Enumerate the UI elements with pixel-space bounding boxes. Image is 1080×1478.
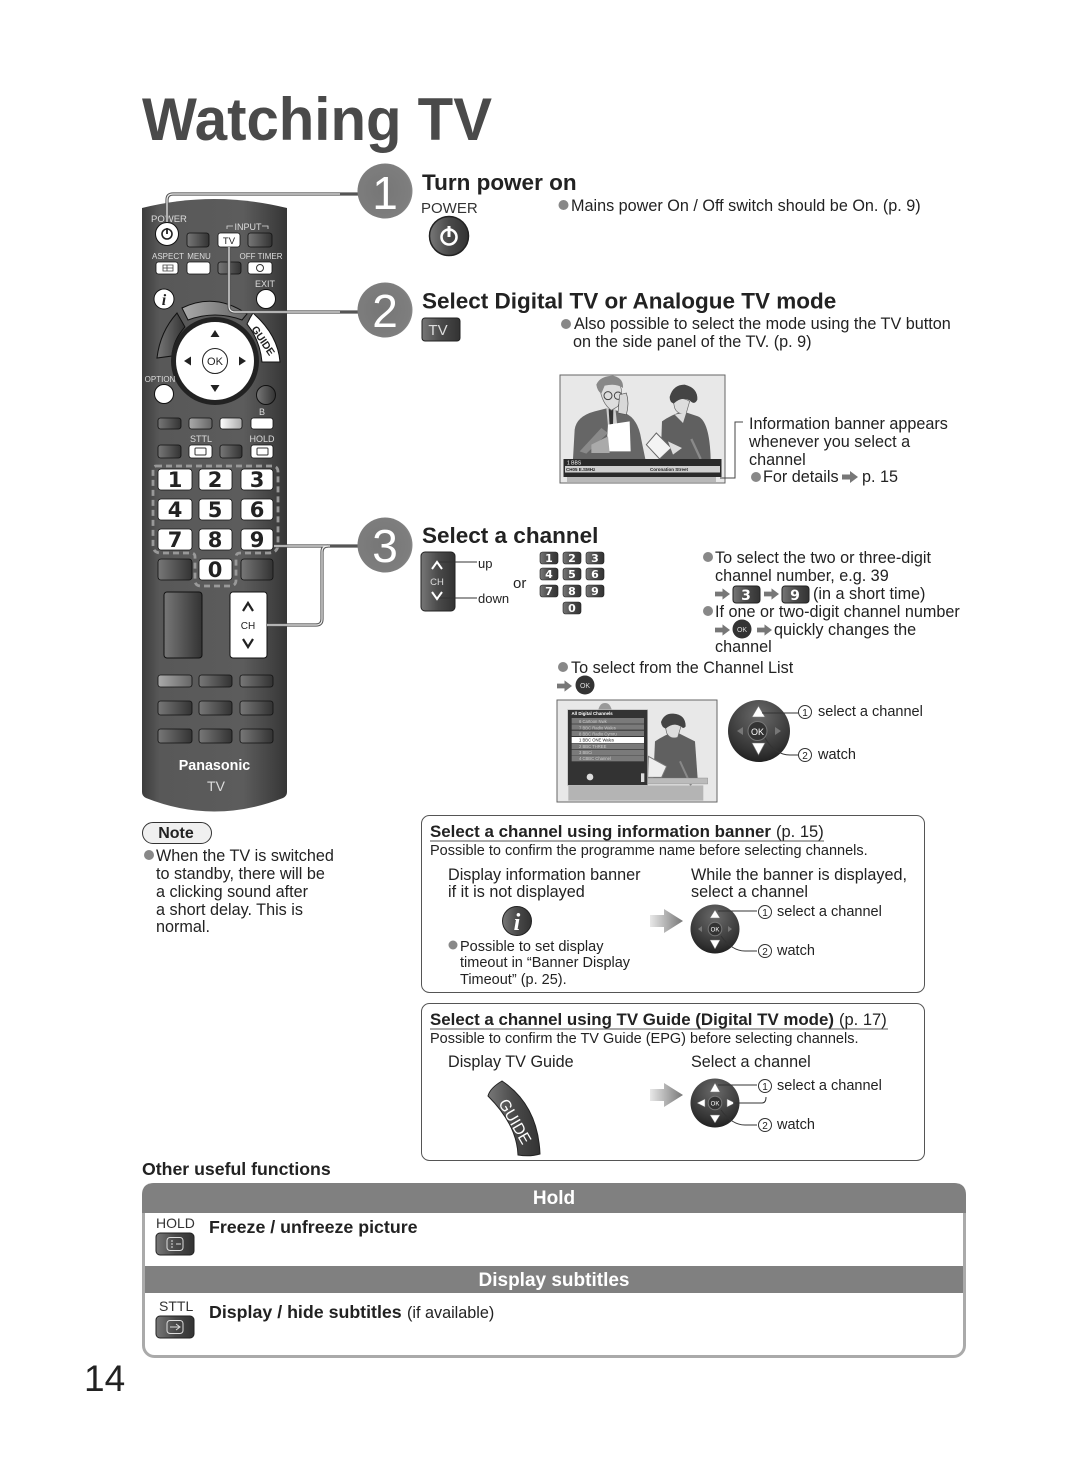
caption: information banner: channel	[749, 451, 806, 469]
panel: information banner	[422, 816, 924, 992]
remote control: HOLD	[249, 434, 275, 444]
note text	[144, 847, 334, 936]
note text: When the TV is switched	[156, 847, 334, 865]
note badge	[142, 822, 212, 844]
remote control: 9	[250, 528, 264, 552]
note: digit entry: channel number, e.g. 39	[715, 567, 889, 585]
d-pad: watch	[776, 943, 815, 959]
note: digit entry: 3	[741, 588, 751, 604]
d-pad: 1	[762, 908, 768, 919]
TV screen with information banner: 1 BBS	[567, 460, 582, 466]
panel heading: Select a channel using information banner	[430, 823, 772, 841]
subtitles button	[156, 1298, 194, 1338]
TV screen with channel list: 3 BBCi	[579, 750, 592, 755]
or: or	[513, 575, 526, 592]
TV screen with channel list: 6 Cartoon Nwk	[579, 719, 608, 724]
TV screen with channel list: All Digital Channels	[572, 711, 613, 716]
top buttons	[156, 233, 272, 274]
caption: information banner: whenever you select a	[748, 433, 910, 451]
icon: number keys: 4	[545, 568, 553, 581]
subtitles description: Display / hide subtitles	[209, 1302, 402, 1322]
icon: number keys: 3	[591, 552, 599, 565]
TV screen with channel list: 8 BBC Radio Cymru	[579, 732, 617, 736]
step number 1	[358, 164, 412, 219]
heading: select a channel: Select a channel	[422, 523, 598, 548]
hold description: Freeze / unfreeze picture	[209, 1217, 418, 1237]
d-pad: OK	[711, 928, 719, 934]
TV screen with channel list	[557, 700, 717, 802]
heading: other useful functions: Other useful functions	[142, 1159, 331, 1179]
remote control: TV	[223, 236, 236, 247]
colour buttons	[158, 418, 273, 458]
d-pad: select a channel	[777, 904, 882, 920]
note text: a clicking sound after	[156, 883, 309, 901]
icon: info button: i	[514, 910, 521, 936]
d-pad	[690, 904, 882, 959]
number keys dashed outline	[153, 466, 278, 586]
note badge: Note	[158, 825, 194, 842]
remote control: 2	[208, 468, 222, 492]
note: digit entry: OK	[580, 683, 590, 690]
remote control: OPTION	[145, 375, 176, 384]
remote control: 7	[168, 528, 182, 552]
power label: POWER	[421, 200, 478, 217]
icon: guide button: GUIDE	[495, 1096, 534, 1147]
d-pad: select and watch: select a channel	[818, 704, 923, 720]
icon: number keys: 2	[568, 552, 576, 565]
note: digit entry: quickly changes the	[774, 621, 916, 639]
step number 2	[358, 282, 412, 338]
left column text	[448, 866, 641, 901]
note: side panel: Also possible to select the mode using the TV button	[574, 315, 951, 333]
left column text: Display TV Guide	[448, 1053, 574, 1071]
d-pad: select a channel	[777, 1078, 882, 1094]
remote control: Panasonic	[179, 758, 250, 774]
remote control: 0	[208, 558, 222, 582]
d-pad: 1	[762, 1082, 768, 1093]
step 1	[358, 164, 921, 256]
icon: number keys: 7	[545, 585, 553, 598]
remote control: ASPECT	[152, 252, 184, 261]
right column text: select a channel	[691, 883, 808, 901]
note: digit entry: To select from the Channel List	[571, 659, 794, 677]
icon: number keys	[540, 552, 604, 615]
note: side panel: on the side panel of the TV. (p. 9)	[573, 333, 811, 351]
caption: information banner: p. 15	[862, 468, 898, 486]
icon: CH button: up	[478, 556, 492, 571]
timeout note	[448, 939, 631, 988]
icon: CH button: down	[478, 591, 509, 606]
note: digit entry: 9	[790, 588, 800, 604]
icon: number keys: 0	[568, 602, 576, 615]
heading: turn power on: Turn power on	[422, 170, 577, 195]
right column text: Select a channel	[691, 1053, 811, 1071]
d-pad	[690, 1078, 882, 1133]
subtitles header: Display subtitles	[478, 1270, 630, 1291]
note: side panel	[561, 315, 951, 351]
icon: number keys: 9	[591, 585, 599, 598]
subtitles button: STTL	[159, 1298, 193, 1314]
hold header: Hold	[533, 1188, 575, 1209]
right column text: While the banner is displayed,	[691, 866, 907, 884]
note: digit entry	[557, 549, 960, 694]
d-pad: watch	[776, 1117, 815, 1133]
hold button	[156, 1215, 195, 1255]
panel heading: (p. 17)	[839, 1011, 887, 1029]
volume and channel rockers	[164, 592, 202, 658]
d-pad: select and watch: OK	[751, 727, 764, 737]
power button: POWER	[151, 214, 187, 225]
note text: to standby, there will be	[156, 865, 325, 883]
remote control: 8	[208, 528, 222, 552]
TV screen with channel list: 4 CBBC Channel	[579, 756, 611, 761]
left column text: Display information banner	[448, 866, 641, 884]
subtitles header	[145, 1266, 963, 1293]
step number 2: 2	[372, 285, 398, 337]
info button: i	[162, 292, 167, 309]
heading: select mode: Select Digital TV or Analogue TV mode	[422, 288, 836, 314]
icon: TV button: TV	[428, 322, 448, 339]
TV screen with channel list: 1 BBC ONE Wales	[579, 738, 614, 742]
icon: number keys: 6	[591, 568, 599, 581]
remote control: 5	[208, 498, 222, 522]
subtitles description	[209, 1302, 494, 1322]
d-pad: 2	[762, 947, 768, 958]
timeout note: Timeout” (p. 25).	[460, 972, 567, 988]
bracket	[720, 422, 743, 478]
caption: information banner	[748, 415, 948, 486]
power button	[151, 214, 187, 246]
TV screen with information banner	[560, 375, 725, 483]
note	[142, 822, 334, 936]
timeout note: Possible to set display	[460, 939, 604, 955]
TV screen with channel list: 7 BBC Radio Wales	[579, 726, 616, 730]
step number 3: 3	[372, 520, 398, 572]
caption: information banner: Information banner appears	[749, 415, 948, 433]
panel: TV guide	[422, 1004, 924, 1160]
panel heading: (p. 15)	[776, 823, 824, 841]
step 3	[358, 518, 960, 802]
arrow	[650, 1083, 683, 1107]
icon: TV button	[422, 318, 460, 341]
remote control: STTL	[190, 434, 212, 444]
remote control: EXIT	[255, 279, 275, 289]
arc buttons and d-pad: GUIDE	[249, 324, 277, 358]
lower buttons	[158, 675, 273, 743]
remote control: INPUT	[234, 222, 262, 232]
hold header	[142, 1183, 966, 1213]
page number: 14	[84, 1358, 125, 1399]
arc buttons and d-pad	[157, 301, 280, 405]
right column text	[691, 866, 907, 901]
icon: info button	[502, 906, 532, 936]
timeout note: timeout in “Banner Display	[460, 955, 631, 971]
icon: number keys: 5	[568, 568, 576, 581]
remote control: CH	[241, 621, 255, 632]
remote control: TV	[207, 778, 226, 794]
d-pad: select and watch: 2	[802, 751, 808, 762]
left column text: if it is not displayed	[448, 883, 585, 901]
remote control	[142, 199, 287, 812]
arrow	[650, 909, 683, 933]
note: digit entry: OK	[737, 627, 747, 634]
note: digit entry: If one or two-digit channel number	[715, 603, 960, 621]
panel heading: Select a channel using TV Guide (Digital TV mode)	[430, 1011, 834, 1029]
icon: number keys: 8	[568, 585, 576, 598]
icon: number keys: 1	[545, 552, 553, 565]
connector lines	[167, 194, 370, 625]
d-pad: OK	[711, 1102, 719, 1108]
title: Watching TV	[142, 86, 492, 153]
note: digit entry: channel	[715, 638, 772, 656]
panel subtitle: Possible to confirm the TV Guide (EPG) before selecting channels.	[430, 1031, 859, 1047]
note: mains power: Mains power On / Off switch should be On. (p. 9)	[571, 197, 921, 215]
TV screen with channel list: 2 BBC THREE	[579, 744, 607, 749]
d-pad: 2	[762, 1121, 768, 1132]
number keys	[158, 469, 273, 580]
icon: CH button	[421, 552, 509, 611]
remote control: 6	[250, 498, 264, 522]
note text: a short delay. This is	[156, 901, 303, 919]
subtitles description: (if available)	[407, 1304, 494, 1322]
remote control: 4	[168, 498, 182, 522]
panel subtitle: Possible to confirm the programme name before selecting channels.	[430, 843, 868, 859]
step number 3	[358, 518, 412, 572]
remote control: OFF TIMER	[240, 252, 283, 261]
hold button: HOLD	[156, 1215, 195, 1231]
d-pad: select and watch: watch	[817, 747, 856, 763]
remote control: MENU	[187, 252, 211, 261]
info button	[154, 289, 174, 309]
remote control: B	[259, 407, 265, 417]
icon: power button	[430, 216, 468, 256]
icon: CH button: CH	[430, 577, 444, 588]
note: digit entry: (in a short time)	[813, 585, 925, 603]
d-pad: select and watch	[728, 700, 923, 763]
panel: other useful functions	[142, 1183, 966, 1356]
remote control: 1	[168, 468, 182, 492]
caption: information banner: For details	[763, 468, 839, 486]
step 2	[358, 282, 951, 486]
arc buttons and d-pad: OK	[207, 356, 224, 368]
remote control: 3	[250, 468, 264, 492]
d-pad: select and watch: 1	[802, 708, 808, 719]
TV screen with information banner: CH05 E.SMHz	[566, 467, 596, 472]
step number 1: 1	[372, 167, 398, 219]
icon: guide button	[488, 1081, 540, 1156]
note: digit entry: To select the two or three-digit	[715, 549, 931, 567]
TV screen with information banner: Coronation Street	[650, 467, 689, 472]
note text: normal.	[156, 918, 210, 936]
